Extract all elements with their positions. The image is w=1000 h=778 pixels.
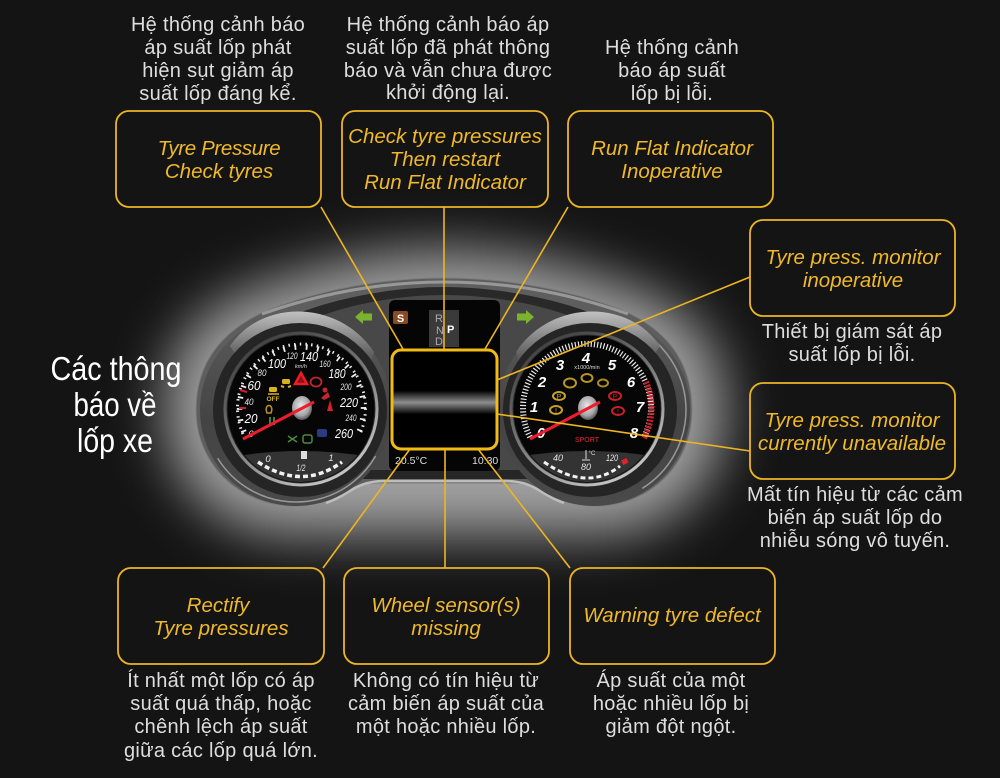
fuel gauge: 1: [328, 453, 334, 464]
callout: Tyre press. monitor inoperative: inoperative: [803, 269, 903, 292]
speedometer needle: [243, 396, 314, 439]
central display: [389, 300, 500, 471]
description: tyre pressure check: [131, 14, 305, 105]
fuel gauge: [258, 451, 342, 476]
description: tyre pressure check: áp suất lốp phát: [144, 37, 292, 59]
fuel gauge: 1/2: [296, 463, 306, 474]
tachometer numbers: 7: [636, 399, 645, 416]
description: monitor fault: Thiết bị giám sát áp: [762, 321, 942, 343]
callout: Tyre press. monitor currently unavailable: [750, 383, 955, 479]
fuel subdial: [244, 451, 358, 482]
callout: Tyre Pressure Check tyres: Check tyres: [165, 160, 273, 183]
callout: Tyre press. monitor inoperative: [750, 220, 955, 316]
warning lights right: [550, 374, 624, 416]
tachometer numbers: 2: [537, 374, 547, 391]
title: lốp xe: [77, 422, 153, 459]
description: restart needed: khởi động lại.: [386, 82, 510, 104]
tachometer ticks: [523, 344, 652, 438]
callout: Wheel sensor(s) missing: [344, 568, 549, 664]
callout: Wheel sensor(s) missing: Wheel sensor(s): [371, 594, 521, 617]
highlighted screen: [392, 350, 497, 449]
description: no sensor signal: cảm biến áp suất của: [348, 693, 545, 715]
centre panel: [270, 295, 620, 470]
speedometer numbers: 80: [258, 368, 267, 379]
warning lights right: P: [613, 394, 618, 401]
callout: Check tyre pressures: [342, 111, 548, 207]
callout: Wheel sensor(s) missing: missing: [411, 617, 481, 640]
warning lights left: OFF: [266, 396, 280, 403]
S badge: [393, 311, 408, 325]
tachometer numbers: x1000/min: [574, 365, 600, 371]
description: signal lost: nhiễu sóng vô tuyến.: [760, 529, 950, 552]
callout: Warning tyre defect: Warning tyre defect: [583, 604, 762, 627]
description: sudden drop: hoặc nhiều lốp bị: [593, 693, 749, 715]
description: low pressure: giữa các lốp quá lớn.: [124, 740, 318, 762]
callout: Rectify Tyre pressures: Tyre pressures: [153, 617, 289, 640]
description: low pressure: suất quá thấp, hoặc: [130, 693, 312, 715]
tachometer numbers: 3: [556, 357, 565, 374]
speedometer numbers: 60: [248, 378, 261, 393]
gear selector: N: [436, 325, 444, 337]
callout: Tyre Pressure Check tyres: Tyre Pressure: [158, 137, 280, 160]
callout: Tyre press. monitor currently unavailable: currently unavailable: [758, 432, 946, 455]
description: sudden drop: [593, 669, 749, 738]
left gauge pod: [200, 312, 387, 506]
warning lights right: !: [555, 408, 557, 415]
background glow behind cluster: [165, 250, 725, 535]
right gauge pod: [503, 312, 690, 506]
speedometer numbers: 260: [334, 426, 354, 441]
fuel gauge: 0: [265, 454, 271, 465]
gear selector: [429, 310, 459, 348]
description: signal lost: biến áp suất lốp do: [768, 507, 942, 529]
callout: Tyre press. monitor currently unavailable: Tyre press. monitor: [764, 409, 941, 432]
description: no sensor signal: Không có tín hiệu từ: [353, 670, 539, 692]
temperature gauge: 80: [581, 462, 592, 473]
callout: Run Flat Indicator Inoperative: Inoperative: [621, 160, 723, 183]
S badge: S: [397, 313, 404, 325]
gear selector: P: [447, 324, 454, 336]
description: monitor fault: [762, 321, 942, 366]
speedometer numbers: 160: [320, 359, 331, 370]
speedometer numbers: 120: [286, 351, 298, 362]
tachometer numbers: 6: [627, 374, 636, 391]
speedometer numbers: 40: [244, 397, 254, 408]
callout: Rectify Tyre pressures: [118, 568, 324, 664]
tachometer numbers: SPORT: [575, 437, 600, 444]
speedometer numbers: km/h: [295, 364, 307, 370]
title: [50, 350, 182, 459]
description: tyre pressure check: suất lốp đáng kể.: [139, 83, 297, 105]
title: Các thông: [50, 350, 182, 387]
speedometer numbers: 240: [345, 413, 357, 424]
clock readout: 10:30: [472, 455, 498, 467]
description: sudden drop: Áp suất của một: [596, 669, 746, 692]
tachometer numbers: 0: [537, 425, 546, 442]
description: restart needed: suất lốp đã phát thông: [346, 37, 550, 59]
temperature gauge: 120: [606, 453, 619, 464]
lower rim strip: [326, 481, 564, 503]
temperature gauge: [544, 450, 629, 478]
description: no sensor signal: một hoặc nhiều lốp.: [356, 716, 536, 738]
speedometer numbers: 200: [340, 382, 352, 393]
description: signal lost: Mất tín hiệu từ các cảm: [747, 484, 963, 506]
tachometer needle: [530, 396, 600, 439]
description: sudden drop: giảm đột ngột.: [606, 716, 736, 738]
tachometer numbers: 8: [630, 425, 639, 442]
gear selector: D: [435, 336, 443, 348]
arrow: left indicator: [355, 310, 372, 324]
description: low pressure: [124, 669, 318, 762]
description: low pressure: Ít nhất một lốp có áp: [127, 669, 315, 692]
description: system fault: báo áp suất: [618, 60, 726, 82]
description: restart needed: báo và vẫn chưa được: [344, 59, 552, 82]
temperature gauge: 40: [553, 453, 564, 464]
speedometer numbers: 20: [244, 411, 258, 426]
speedometer numbers: 140: [300, 349, 319, 364]
gear selector: R: [435, 313, 443, 325]
speedometer numbers: 100: [268, 356, 287, 371]
description: signal lost: [747, 484, 963, 552]
temperature gauge: °C: [589, 451, 596, 457]
description: low pressure: chênh lệch áp suất: [134, 716, 308, 738]
description: restart needed: [344, 14, 552, 104]
temperature subdial: [530, 451, 644, 482]
callout: Run Flat Indicator Inoperative: [568, 111, 773, 207]
description: no sensor signal: [348, 670, 545, 738]
callout: Rectify Tyre pressures: Rectify: [187, 594, 251, 617]
tachometer numbers: 5: [608, 357, 617, 374]
description: restart needed: Hệ thống cảnh báo áp: [347, 14, 549, 36]
tachometer numbers: [530, 350, 645, 444]
cluster housing: [196, 278, 692, 506]
description: monitor fault: suất lốp bị lỗi.: [788, 343, 916, 366]
callout: Check tyre pressures: Then restart: [390, 148, 502, 171]
lower dark band: [340, 470, 550, 479]
description: tyre pressure check: Hệ thống cảnh báo: [131, 14, 305, 36]
callout: Check tyre pressures: Check tyre pressures: [348, 125, 542, 148]
instrument cluster: [196, 278, 692, 506]
description: system fault: lốp bị lỗi.: [631, 82, 713, 105]
dark upper band: [240, 287, 650, 470]
description: system fault: Hệ thống cảnh: [605, 37, 739, 59]
speedometer numbers: [244, 349, 359, 441]
speedometer numbers: 220: [339, 395, 359, 410]
speedometer ticks: [237, 344, 365, 434]
arrow: right indicator: [517, 310, 534, 324]
speedometer numbers: 0: [248, 429, 254, 440]
description: tyre pressure check: hiện sụt giảm áp: [142, 60, 294, 82]
tachometer numbers: 1: [530, 399, 538, 416]
title: báo về: [74, 386, 156, 423]
callout: Run Flat Indicator Inoperative: Run Flat Indicator: [591, 137, 754, 160]
callout: Tyre Pressure Check tyres: [116, 111, 321, 207]
warning lights right: !: [617, 409, 619, 416]
tachometer numbers: 4: [581, 350, 591, 367]
upper rim highlight: [262, 282, 628, 314]
speedometer numbers: 180: [328, 366, 346, 381]
description: system fault: [605, 37, 739, 105]
temperature readout: 20.5°C: [395, 455, 428, 467]
callout: Tyre press. monitor inoperative: Tyre press. monitor: [765, 246, 942, 269]
warning lights right: P: [557, 394, 562, 401]
warning lights left: [266, 373, 333, 443]
connector lines: [321, 207, 750, 568]
callout: Check tyre pressures: Run Flat Indicator: [364, 171, 527, 194]
callout: Warning tyre defect: [570, 568, 775, 664]
